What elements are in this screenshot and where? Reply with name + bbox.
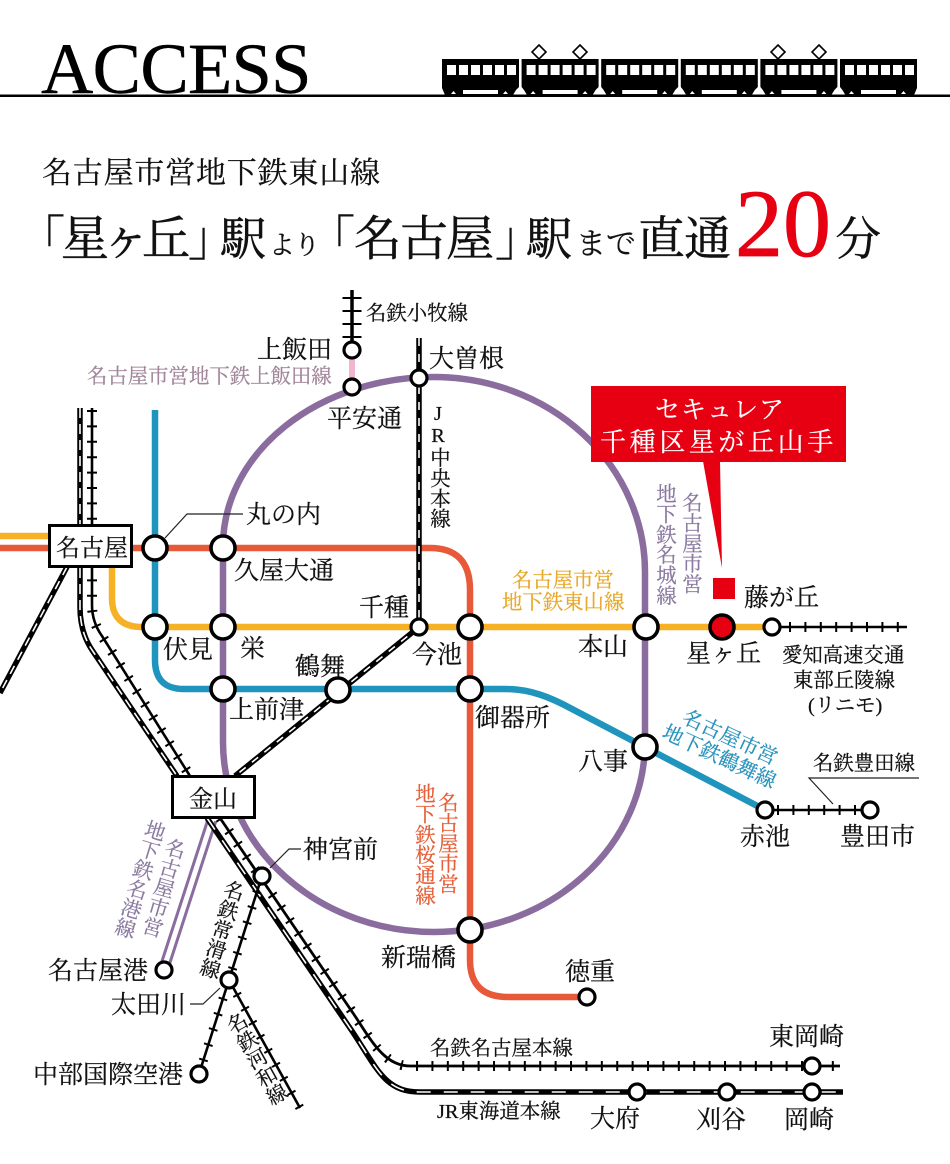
headline: まで bbox=[576, 228, 636, 261]
line: Sakura-dori bbox=[0, 548, 587, 997]
header rule bbox=[0, 94, 950, 97]
line: Tsurumai bbox=[155, 410, 765, 810]
station names: 鶴舞 bbox=[295, 653, 345, 681]
line: Meiko bbox=[164, 820, 212, 968]
route map lines bbox=[0, 290, 907, 1108]
current station: Hoshigaoka bbox=[710, 615, 734, 639]
headline: より bbox=[269, 231, 320, 260]
station names: 上前津 bbox=[229, 696, 304, 724]
line names: 愛知高速交通 bbox=[782, 644, 904, 667]
station names: 徳重 bbox=[565, 958, 615, 986]
station names: 御器所 bbox=[475, 704, 550, 732]
station names: 東岡崎 bbox=[769, 1023, 844, 1051]
line: Meitetsu Nagoya bbox=[220, 818, 840, 1066]
headline: 分 bbox=[835, 214, 881, 265]
station names: 千種 bbox=[359, 594, 409, 622]
station names: 八事 bbox=[578, 748, 628, 776]
station box: Nagoya bbox=[50, 526, 132, 566]
station names: 藤が丘 bbox=[744, 584, 819, 612]
station names: 大府 bbox=[590, 1105, 640, 1133]
line names bbox=[87, 302, 915, 1123]
line names: 名古屋市営 bbox=[512, 569, 614, 592]
line names: 名鉄小牧線 bbox=[366, 302, 468, 325]
icon: train bbox=[442, 45, 917, 95]
station names: 今池 bbox=[412, 641, 462, 669]
line: Meijo loop bbox=[223, 377, 645, 932]
line names: 名古屋市営地下鉄上飯田線 bbox=[87, 365, 332, 388]
line names: 名古屋市営 bbox=[137, 835, 188, 939]
line: JR Tokaido north bbox=[80, 408, 177, 776]
line names: 地下鉄鶴舞線 bbox=[659, 721, 779, 793]
station names: 大曽根 bbox=[429, 345, 504, 373]
station names: 赤池 bbox=[740, 823, 790, 851]
station names: 伏見 bbox=[163, 636, 213, 664]
station names: 名古屋港 bbox=[48, 957, 148, 985]
line names: 名鉄名古屋本線 bbox=[430, 1037, 573, 1060]
station names: 丸の内 bbox=[246, 501, 321, 529]
callout bbox=[591, 386, 846, 568]
line: Meitetsu Komaki bbox=[350, 290, 354, 345]
line: Meitetsu Toyota bbox=[765, 809, 870, 811]
subheading: 名古屋市営地下鉄東山線 bbox=[42, 157, 381, 190]
station names: 久屋大通 bbox=[234, 557, 334, 585]
line names: 名古屋市営 bbox=[679, 492, 702, 594]
station names: 神宮前 bbox=[303, 836, 378, 864]
station names bbox=[33, 336, 915, 1134]
line names: JR東海道本線 bbox=[437, 1100, 560, 1123]
stations bbox=[143, 342, 878, 1100]
line names: 地下鉄桜通線 bbox=[412, 783, 435, 905]
line names: 地下鉄名城線 bbox=[653, 483, 676, 605]
line: Higashiyama bbox=[0, 536, 772, 627]
line names: 名古屋市営 bbox=[679, 706, 781, 770]
headline: 20 bbox=[735, 170, 831, 277]
station names: 刈谷 bbox=[696, 1106, 746, 1134]
line names: 名古屋市営 bbox=[435, 792, 458, 894]
line: Kamiiida bbox=[349, 350, 355, 387]
line: Meitetsu Tokoname bbox=[199, 876, 262, 1074]
line: Meitetsu Nagoya north bbox=[92, 408, 190, 776]
line: Meitetsu Kawawa bbox=[229, 980, 300, 1108]
line names: JR中央本線 bbox=[427, 403, 450, 529]
line names: 地下鉄東山線 bbox=[502, 591, 624, 614]
line: JR Chuo bbox=[235, 338, 419, 776]
station names: 岡崎 bbox=[784, 1106, 834, 1134]
line names: 名鉄河和線 bbox=[220, 1009, 290, 1110]
headline: 「名古屋」 bbox=[307, 213, 543, 266]
station names: 太田川 bbox=[111, 991, 186, 1019]
headline: 駅 bbox=[219, 214, 266, 265]
station names: 本山 bbox=[578, 633, 628, 661]
marker: property bbox=[713, 578, 735, 599]
headline bbox=[17, 170, 881, 277]
callout: 千種区星が丘山手 bbox=[600, 428, 837, 457]
station names: 新瑞橋 bbox=[381, 944, 456, 972]
line names: 名鉄常滑線 bbox=[195, 877, 247, 981]
station names: 栄 bbox=[240, 635, 265, 663]
line names: 東部丘陵線 bbox=[793, 669, 895, 692]
line: Linimo bbox=[772, 626, 907, 628]
line names: 名鉄豊田線 bbox=[813, 752, 915, 775]
headline: 直通 bbox=[638, 214, 731, 266]
station names: 豊田市 bbox=[840, 823, 915, 851]
station names: 平安通 bbox=[327, 405, 402, 433]
callout: セキュレア bbox=[655, 397, 785, 424]
headline: 駅 bbox=[525, 214, 572, 265]
station box: Kanayama bbox=[172, 776, 254, 818]
station names: 星ヶ丘 bbox=[686, 641, 761, 668]
station names: 上飯田 bbox=[257, 336, 332, 364]
station box: Kanayama: 金山 bbox=[189, 786, 237, 813]
line names: (リニモ) bbox=[808, 695, 882, 717]
station box: Nagoya: 名古屋 bbox=[56, 535, 128, 562]
line: JR west diagonal bbox=[0, 567, 67, 693]
title: ACCESS bbox=[41, 28, 311, 109]
leader lines bbox=[165, 514, 919, 1004]
station names: 中部国際空港 bbox=[33, 1061, 183, 1089]
line names: 地下鉄名港線 bbox=[110, 817, 168, 941]
headline: 「星ヶ丘」 bbox=[17, 213, 236, 266]
line: JR Tokaido bbox=[207, 818, 843, 1092]
